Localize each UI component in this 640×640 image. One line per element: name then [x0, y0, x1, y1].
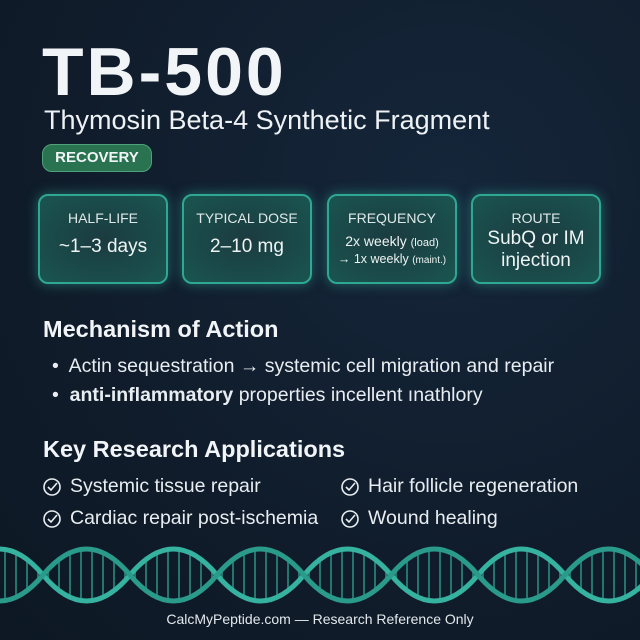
bullet list: mechanism: • Actin sequestration → systemic cell migration and repair — [52, 355, 554, 377]
bullet list: mechanism: • anti-inflammatory properties incellent ınathlory — [52, 384, 483, 406]
checklist: applications — [43, 475, 578, 529]
checklist: applications: Hair follicle regeneration — [368, 475, 578, 497]
checklist: applications: Wound healing — [368, 507, 498, 529]
badge: recovery — [42, 144, 152, 172]
card: frequency: FREQUENCY — [348, 210, 436, 226]
heading: mechanism: Mechanism of Action — [43, 316, 278, 342]
card: half-life: HALF-LIFE — [68, 210, 138, 226]
card: typical dose: 2–10 mg — [210, 236, 284, 257]
card: route: injection — [501, 250, 571, 271]
subtitle: Thymosin Beta-4 Synthetic Fragment — [44, 105, 490, 135]
bullet list: mechanism — [52, 355, 554, 406]
footer: CalcMyPeptide.com — Research Reference Only — [166, 611, 474, 627]
checklist: applications: Cardiac repair post-ischemia — [70, 507, 318, 529]
card: frequency — [327, 194, 457, 284]
badge: recovery: RECOVERY — [55, 149, 139, 166]
checklist: applications: Systemic tissue repair — [70, 475, 261, 497]
dna helix — [0, 546, 640, 604]
card: half-life — [38, 194, 168, 284]
heading: key research applications: Key Research Applications — [43, 436, 345, 462]
card: frequency: → 1x weekly (maint.) — [338, 252, 446, 266]
card: route: SubQ or IM — [487, 228, 585, 249]
card: typical dose — [182, 194, 312, 284]
card: frequency: 2x weekly (load) — [345, 233, 439, 249]
card: route: ROUTE — [512, 210, 560, 226]
card: route — [471, 194, 601, 284]
title: TB-500 — [42, 34, 287, 110]
card: half-life: ~1–3 days — [59, 236, 147, 257]
card: typical dose: TYPICAL DOSE — [196, 210, 298, 226]
